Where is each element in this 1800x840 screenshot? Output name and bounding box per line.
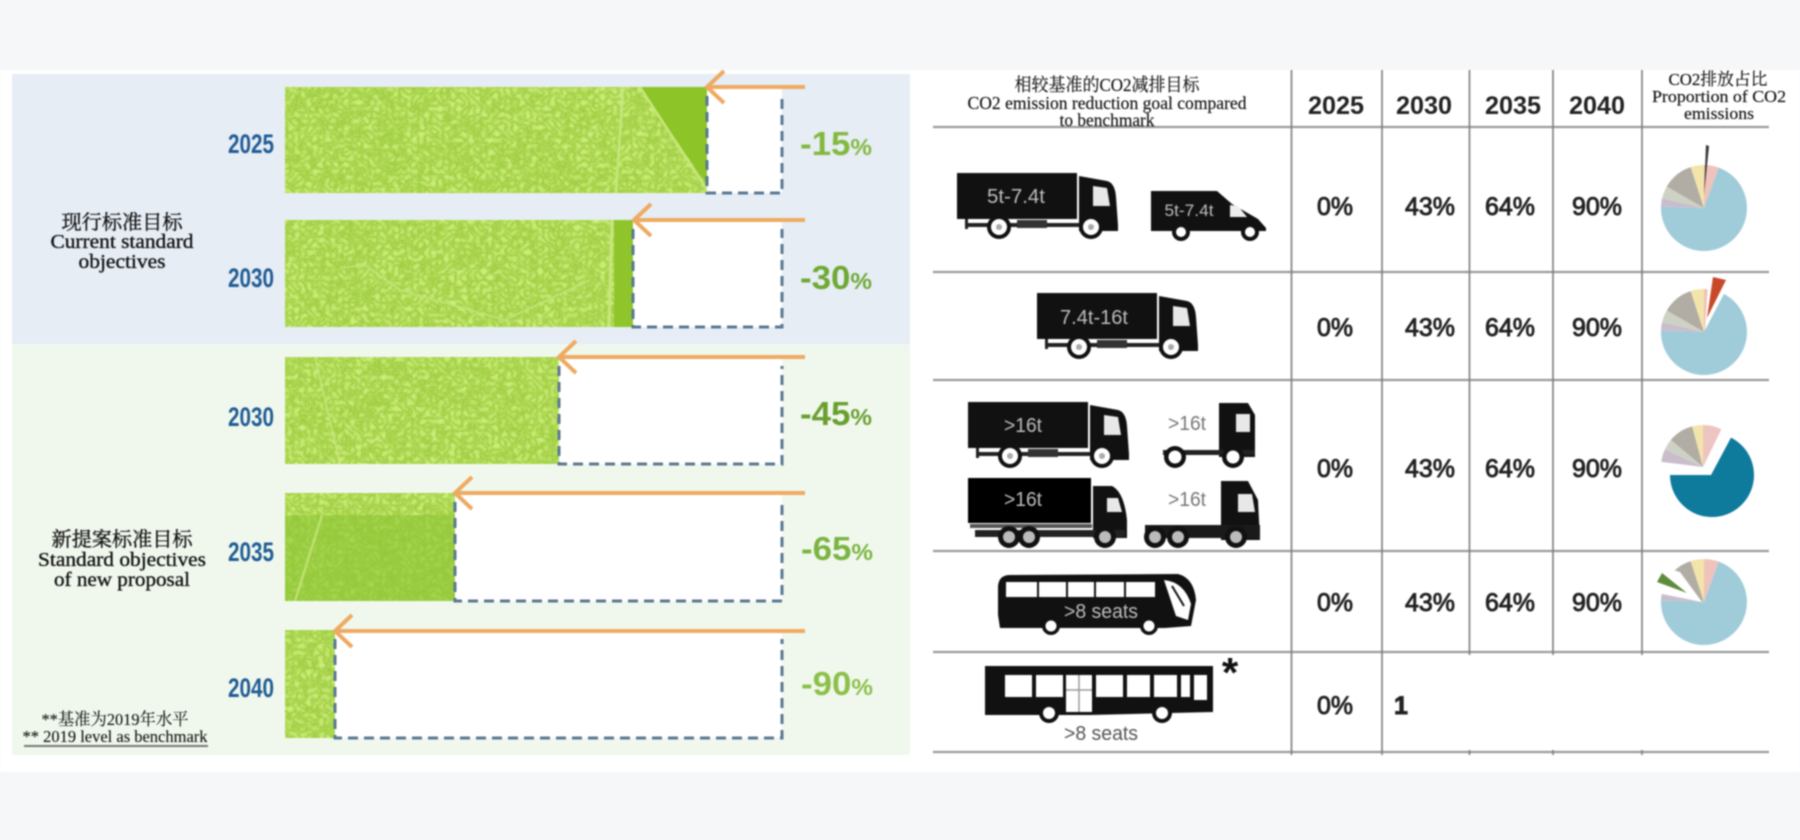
remaining emissions leaf bar [285,630,335,738]
footnote: benchmark [22,709,208,747]
label: new proposal objectives: Standard objectives [38,549,206,571]
panel: new proposal background [12,344,910,755]
year label: 2030 [228,263,274,293]
row values: coach: 43% [1405,589,1455,617]
row values: 5t-7.4t: 0% [1317,193,1353,221]
year label: 2030 [228,402,274,432]
row values: over 16t: 90% [1572,455,1622,483]
icon: over 8 seats city bus [985,666,1213,745]
arrow [455,477,805,509]
label: new proposal objectives [38,528,206,591]
table heading: proportion: Proportion of CO2 [1652,87,1786,106]
icon: 5t-7.4t truck: 5t-7.4t [987,186,1045,208]
row values: 7.4t-16t: 0% [1317,314,1353,342]
year label: 2040 [228,673,274,703]
percent label: -30% [800,259,872,296]
remaining emissions leaf bar [285,493,455,601]
row values: 7.4t-16t: 43% [1405,314,1455,342]
pie chart: 5t-7.4t share [1661,145,1747,251]
table heading: years: 2040 [1569,92,1625,120]
row values: 7.4t-16t: 64% [1485,314,1535,342]
table heading: years: 2030 [1396,92,1452,120]
row values: over 16t: 43% [1405,455,1455,483]
icon: over 16t tractor: >16t [1168,413,1206,435]
row values: 5t-7.4t: 43% [1405,193,1455,221]
percent label: -90% [801,665,873,702]
label: current standard objectives: 现行标准目标 [62,211,184,234]
bar row: 2030 -45% [228,341,872,464]
row values: city bus: 0% [1317,692,1353,720]
row values: 5t-7.4t: 64% [1485,193,1535,221]
table heading: proportion: CO2排放占比 [1668,70,1768,89]
row values: 5t-7.4t [1317,193,1622,221]
row values: city bus [1317,692,1408,720]
table heading: years: 2025 [1308,92,1364,120]
icon: over 16t rigid truck: >16t [1004,415,1042,437]
remaining emissions leaf bar [285,357,559,464]
icon: over 16t three-axle tractor: >16t [1168,489,1206,511]
percent label: -65% [801,530,873,567]
table heading: years [1308,92,1625,120]
dashed reduction box [633,220,782,327]
table heading: goal: 相较基准的CO2减排目标 [1014,75,1200,95]
icon: over 8 seats coach: >8 seats [1064,601,1138,623]
icon: 5t-7.4t van [1151,191,1266,241]
dashed reduction box [455,493,782,601]
bar row: 2030 -30% [228,204,872,327]
row values: over 16t: 64% [1485,455,1535,483]
table heading: goal: CO2 emission reduction goal compared [968,93,1246,113]
table heading: goal [968,75,1246,130]
percent label: -45% [800,395,872,432]
icon: over 8 seats coach [998,574,1196,635]
label: new proposal objectives: 新提案标准目标 [52,528,194,551]
icon: 7.4t-16t truck [1037,293,1198,359]
icon: over 16t three-axle truck: >16t [1004,489,1042,511]
table: CO2 reduction goals by vehicle [933,70,1786,755]
icon: 5t-7.4t van: 5t-7.4t [1164,201,1214,220]
icon: over 8 seats city bus: >8 seats [1064,723,1138,745]
dashed reduction box [559,357,782,464]
row values: city bus: 1 [1394,692,1408,720]
arrow [634,204,805,236]
arrow [335,615,805,647]
panel: current standard background [12,74,910,344]
table heading: proportion [1652,70,1786,123]
icon: over 16t rigid truck [968,402,1129,468]
row values: 7.4t-16t: 90% [1572,314,1622,342]
dashed reduction box [335,630,782,738]
row values: coach: 90% [1572,589,1622,617]
row values: 7.4t-16t [1317,314,1622,342]
pie chart: over 16t share [1661,425,1754,517]
arrow [559,341,805,373]
footnote: benchmark: **基准为2019年水平 [42,709,188,729]
panel: reduction targets chart [12,71,910,755]
pie chart: 7.4t-16t share [1661,277,1747,375]
table heading: proportion: emissions [1684,104,1754,123]
bar row: 2025 -15% [228,71,872,193]
icon: over 16t tractor [1163,403,1255,468]
label: new proposal objectives: of new proposal [54,569,190,591]
row values: coach: 64% [1485,589,1535,617]
bar row: 2035 -65% [228,477,873,601]
remaining emissions leaf bar [285,220,633,327]
row values: coach: 0% [1317,589,1353,617]
year label: 2025 [228,129,274,159]
row values: over 16t [1317,455,1622,483]
arrow [707,71,805,103]
row values: coach [1317,589,1622,617]
table heading: goal: to benchmark [1060,110,1154,130]
icon: 7.4t-16t truck: 7.4t-16t [1060,307,1128,329]
icon: 5t-7.4t truck [957,173,1118,239]
icon: over 16t three-axle tractor [1144,481,1260,548]
bar row: 2040 -90% [228,615,873,738]
footnote: benchmark: ** 2019 level as benchmark [22,727,208,746]
row values: over 16t: 0% [1317,455,1353,483]
table heading: years: 2035 [1485,92,1541,120]
icon: over 16t three-axle truck [968,478,1127,548]
remaining emissions leaf bar [285,87,707,193]
label: current standard objectives [50,211,194,273]
pie chart: coach share [1652,559,1747,645]
row values: 5t-7.4t: 90% [1572,193,1622,221]
percent label: -15% [800,125,872,162]
label: current standard objectives: Current standard [50,231,194,253]
dashed reduction box [707,87,782,193]
label: current standard objectives: objectives [78,251,166,273]
year label: 2035 [228,537,274,567]
asterisk note marker: * [1222,649,1239,696]
